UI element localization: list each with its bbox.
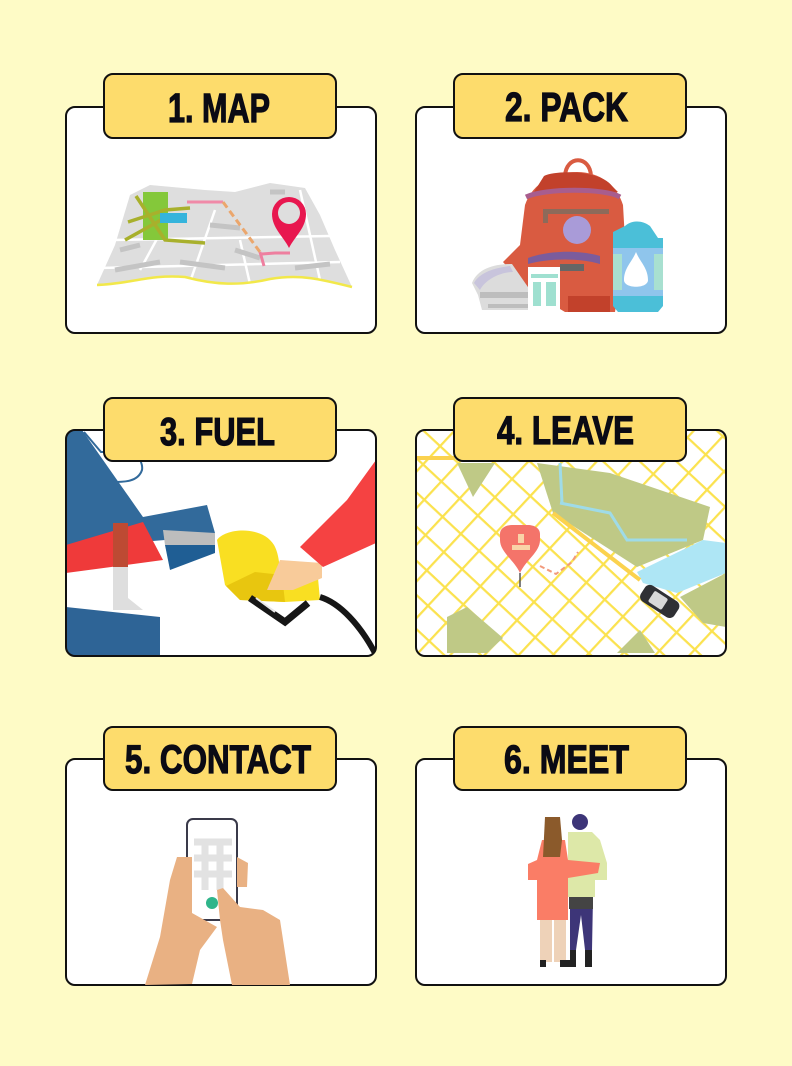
panel: 2. pack — [416, 74, 726, 333]
icon: backpack and supplies — [472, 160, 663, 312]
heading tab — [454, 727, 686, 790]
heading tab: 1. MAP — [168, 85, 270, 131]
heading tab — [104, 74, 336, 138]
panel: 3. fuel — [66, 398, 376, 656]
icon: couple — [528, 814, 607, 967]
panel: 1. map — [66, 74, 376, 333]
icon: location pin — [500, 525, 540, 587]
heading tab: 4. LEAVE — [497, 409, 634, 453]
infographic canvas — [65, 73, 727, 986]
icon: folded clothes — [472, 264, 530, 310]
panel: 5. contact — [66, 727, 376, 985]
heading tab: 6. MEET — [504, 738, 629, 782]
illustration: fuel nozzle — [66, 430, 376, 656]
heading tab — [104, 727, 336, 790]
heading tab: 2. PACK — [505, 84, 628, 130]
icon: water bottle — [613, 222, 663, 312]
heading tab: 5. CONTACT — [125, 738, 311, 782]
icon: car — [640, 584, 680, 618]
heading tab — [104, 398, 336, 461]
icon: map pin — [272, 197, 306, 248]
icon: small box — [528, 267, 560, 310]
icon: phone in hands — [145, 819, 290, 985]
heading tab — [454, 74, 686, 138]
panel: 6. meet — [416, 727, 726, 985]
panel: 4. leave — [416, 398, 726, 656]
heading tab: 3. FUEL — [160, 411, 275, 454]
illustration: street map — [416, 430, 726, 656]
heading tab — [454, 398, 686, 461]
icon: folded map — [97, 183, 352, 287]
